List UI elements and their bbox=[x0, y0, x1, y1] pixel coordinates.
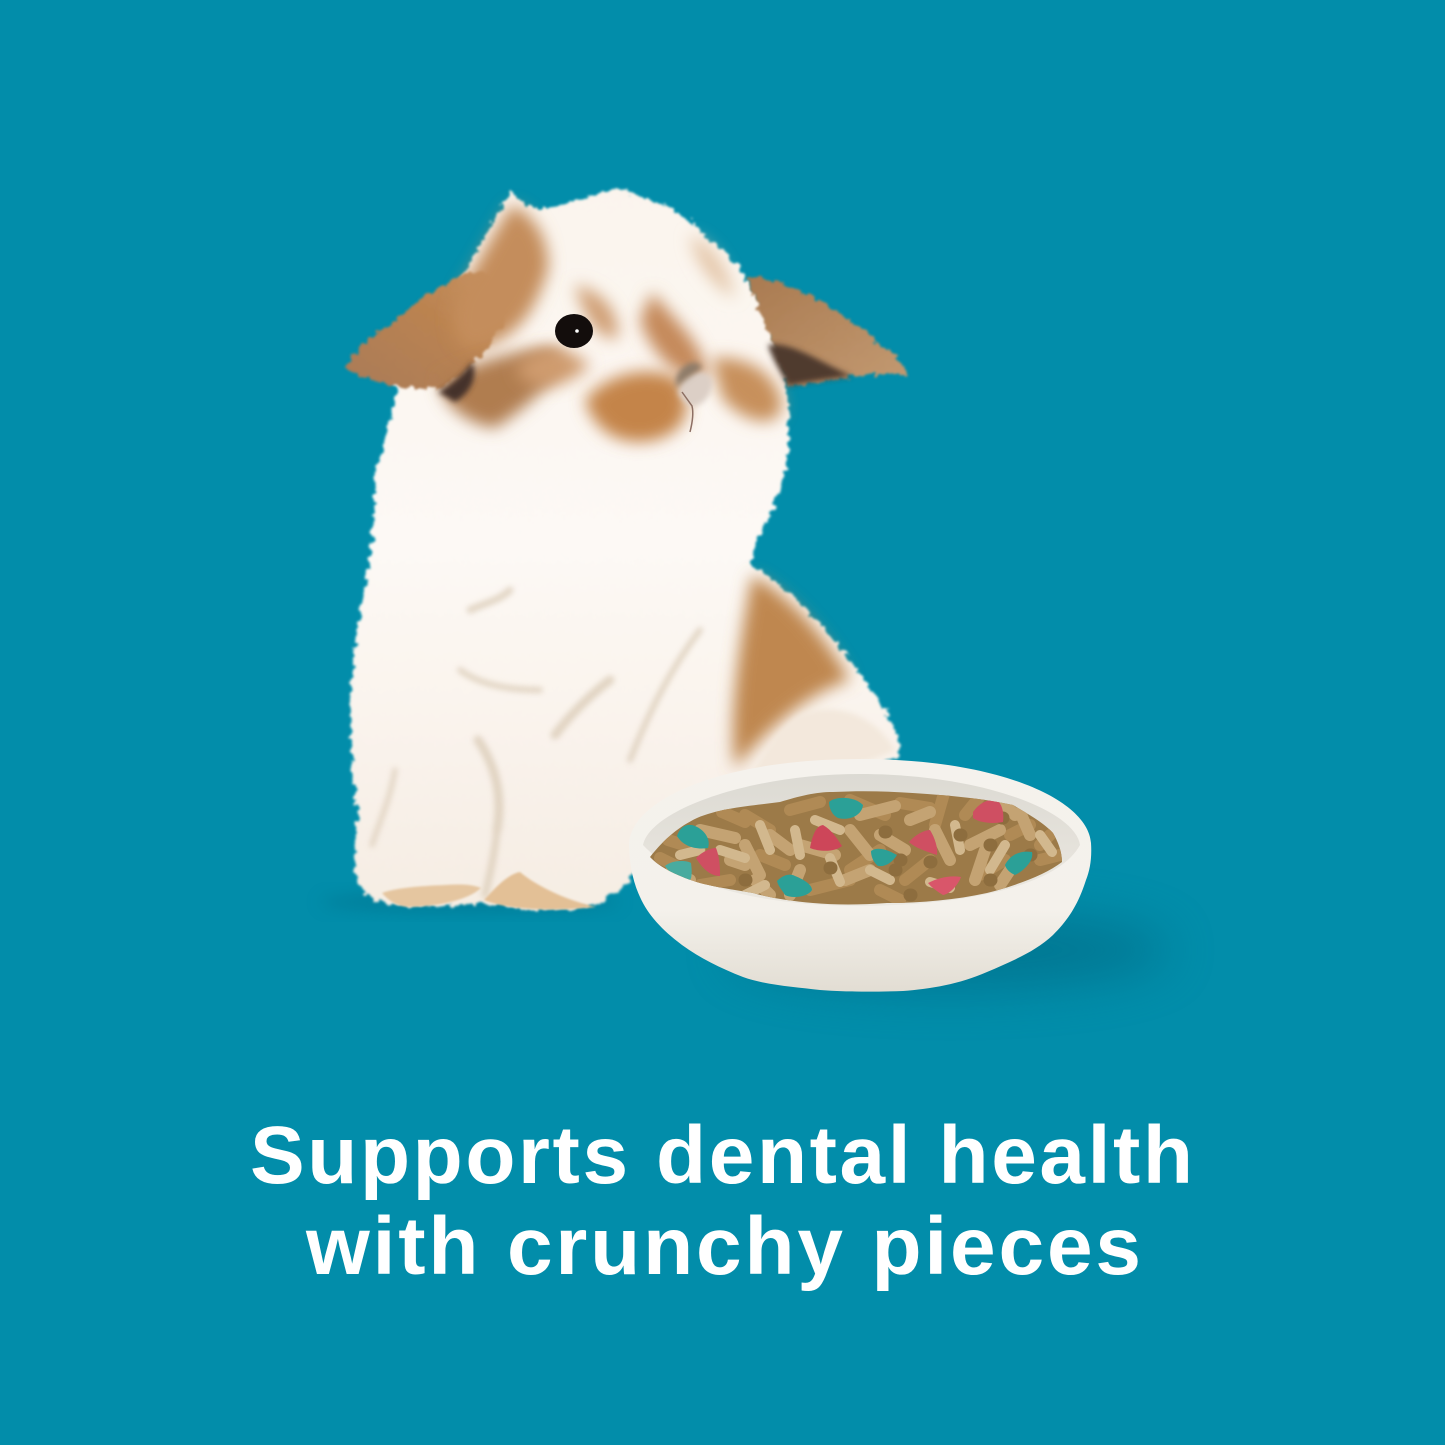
forehead streak left bbox=[575, 285, 618, 338]
heading text bbox=[250, 1110, 1193, 1292]
infographic canvas bbox=[252, 186, 1188, 1291]
blue-green pieces bbox=[665, 798, 1032, 897]
left cheek patch bbox=[440, 349, 560, 428]
pellets bbox=[660, 790, 1060, 900]
forehead patch bbox=[453, 205, 548, 350]
haunch patch bbox=[733, 575, 850, 768]
food base bbox=[650, 791, 1062, 904]
bowl interior bbox=[643, 774, 1080, 906]
nose bbox=[676, 363, 712, 432]
haunch lower fur bbox=[745, 709, 895, 785]
chest and leg shading bbox=[372, 590, 700, 895]
under eye patch bbox=[515, 349, 590, 386]
top right spot bbox=[690, 235, 735, 298]
bowl bbox=[629, 759, 1091, 992]
left ear bbox=[345, 272, 506, 389]
heading line 1: Supports dental health bbox=[250, 1110, 1193, 1201]
bowl outer body bbox=[629, 759, 1091, 992]
bunny silhouette bbox=[351, 186, 899, 910]
right muzzle patch bbox=[712, 358, 782, 421]
pink pieces bbox=[696, 800, 1003, 895]
heading line 2: with crunchy pieces bbox=[305, 1201, 1141, 1292]
forehead streak centre bbox=[640, 292, 708, 379]
muzzle patch bbox=[585, 372, 687, 442]
right ear inner shadow bbox=[768, 344, 852, 386]
bunny feet bbox=[382, 872, 596, 909]
dark ear fold bbox=[438, 362, 474, 402]
eye bbox=[555, 314, 593, 348]
head markings bbox=[438, 205, 782, 442]
bunny bbox=[345, 186, 907, 910]
right ear bbox=[748, 275, 907, 386]
floor shadows bbox=[320, 892, 1170, 988]
food bbox=[650, 791, 1062, 904]
